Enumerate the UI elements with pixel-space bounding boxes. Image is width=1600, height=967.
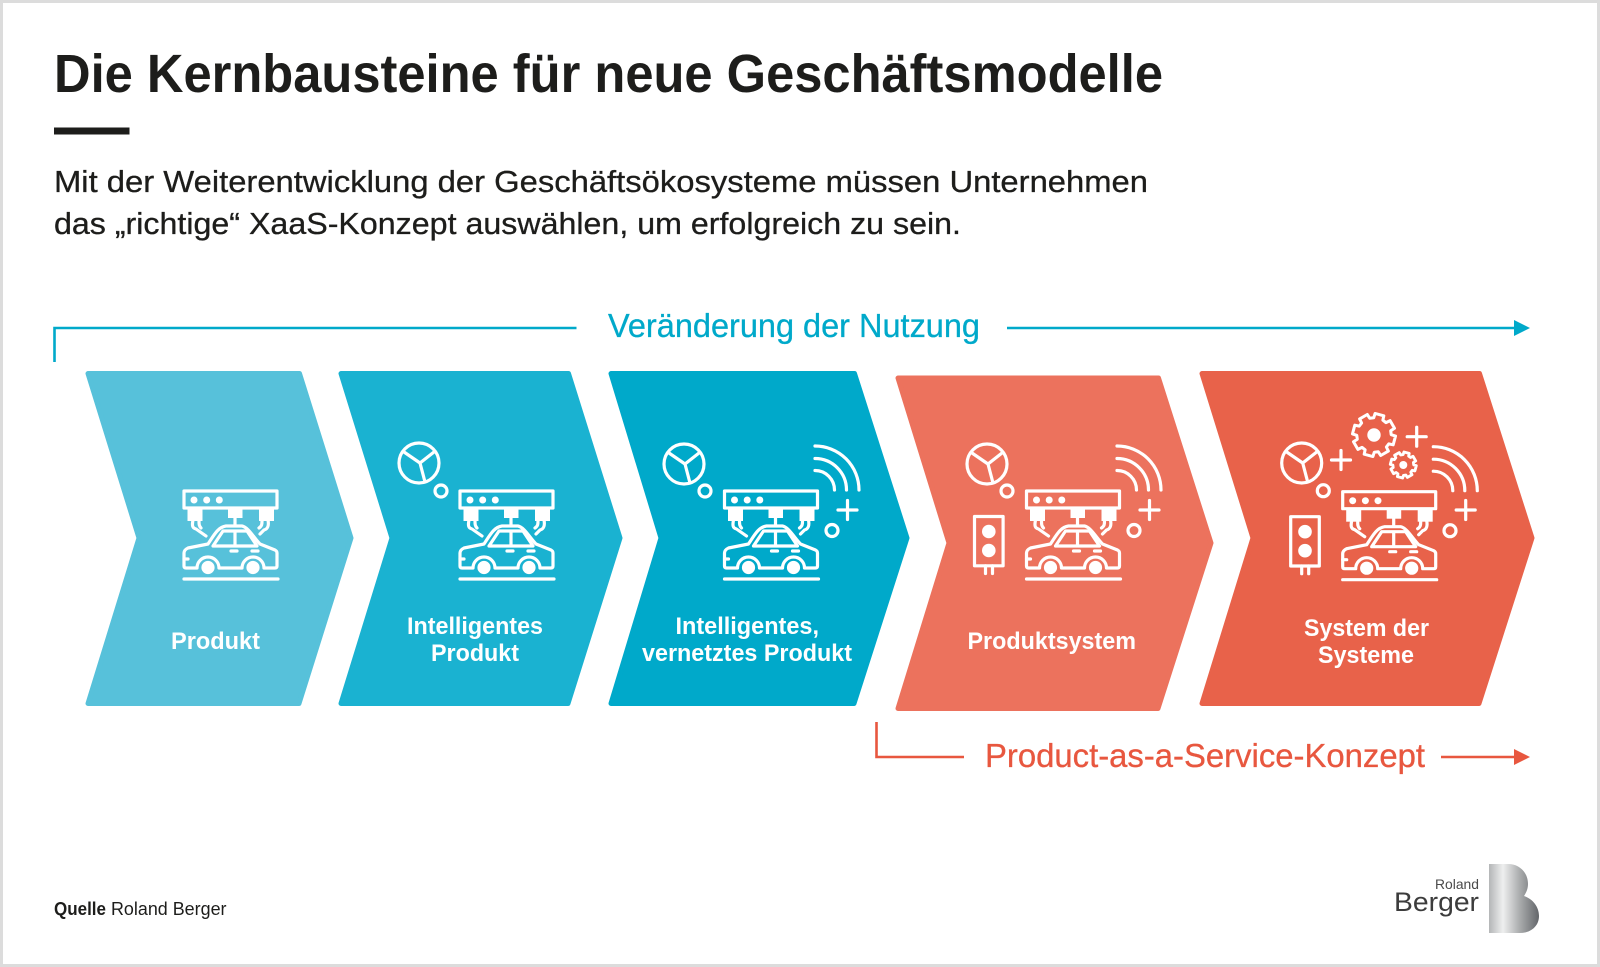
title rule [54,128,130,134]
icon: connected steering thought [399,443,554,579]
label: Produktsystem [968,628,1136,655]
logo: Roland Berger: Berger [1394,887,1479,917]
label: Produkt [431,640,519,667]
intro text [54,164,1148,241]
chevron: Intelligentes Produkt [341,374,620,704]
chevron: Produktsystem [898,378,1211,708]
chevron: System der Systeme [1202,374,1532,704]
title: Die Kernbausteine für neue Geschäftsmodelle [54,44,1163,104]
source note [54,899,226,919]
label: Systeme [1318,642,1414,669]
bracket arrow: Veränderung der Nutzung: Veränderung der Nutzung [608,307,980,344]
source note: Quelle [54,899,106,919]
logo: Roland Berger: Roland [1435,876,1479,892]
logo mark: B [1489,864,1539,933]
intro text: das „richtige“ XaaS-Konzept auswählen, um erfolgreich zu sein. [54,206,961,241]
label: Produkt [171,628,260,655]
label: Intelligentes, [676,613,819,640]
source note: Roland Berger [111,899,226,919]
icon: connected product [664,444,859,579]
chevron: Produkt [88,374,351,704]
label [1304,615,1429,669]
chevron: Intelligentes, vernetztes Produkt [611,374,907,704]
intro text: Mit der Weiterentwicklung der Geschäftsökosysteme müssen Unternehmen [54,164,1148,199]
label [642,613,852,667]
label [407,613,543,667]
label: System der [1304,615,1429,642]
logo: Roland Berger [1394,864,1539,933]
icon: robot car assembly [184,491,278,579]
bracket arrow: Veränderung der Nutzung [54,307,1530,362]
icon: product system [967,444,1161,579]
bracket arrow: Product-as-a-Service-Konzept: Product-as-a-Service-Konzept [985,737,1425,774]
icon: system of systems [1282,409,1477,580]
label: vernetztes Produkt [642,640,852,667]
label: Intelligentes [407,613,543,640]
bracket arrow: Product-as-a-Service-Konzept [876,722,1530,774]
